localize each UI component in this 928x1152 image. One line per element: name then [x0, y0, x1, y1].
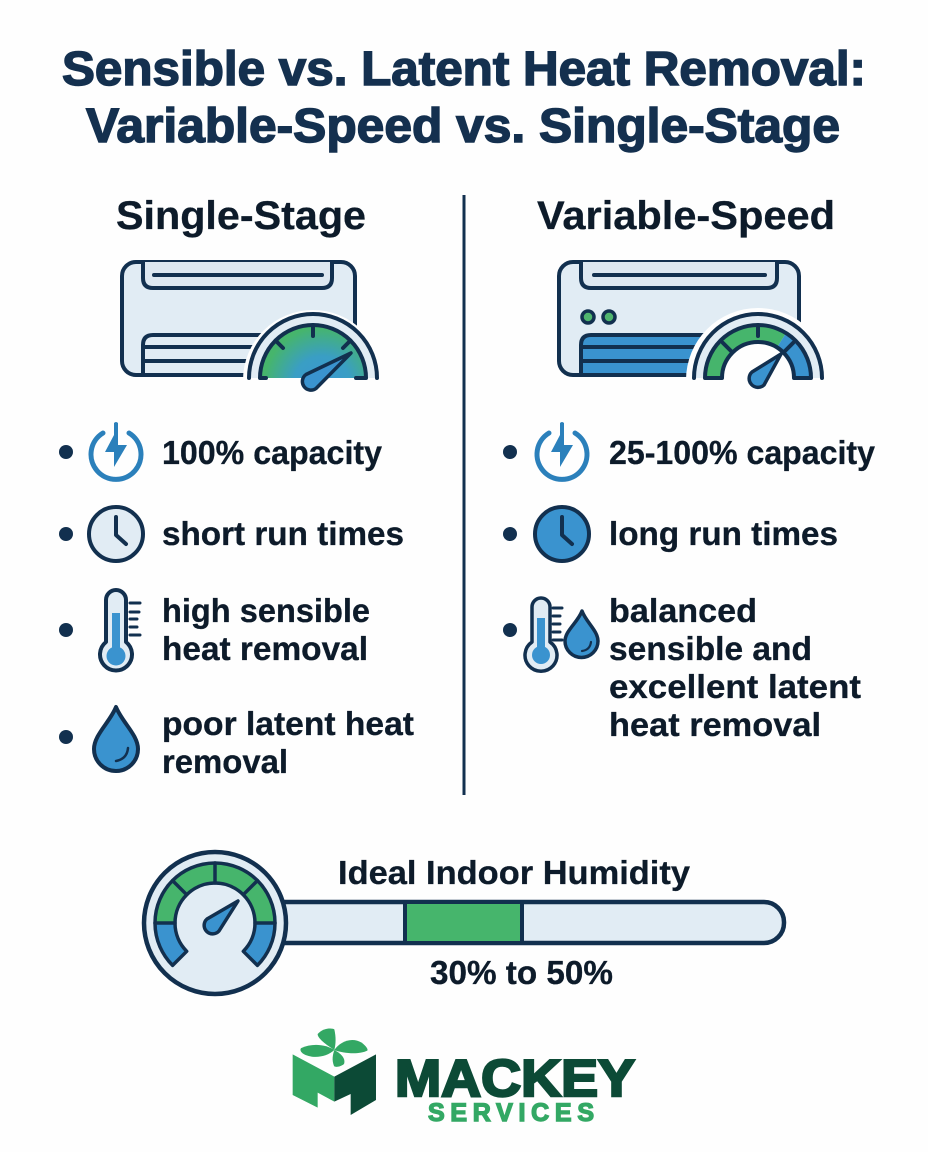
- logo: Mackey Services: SERVICES: [428, 1099, 594, 1127]
- bullet: high sensible heat removal: high sensible: [162, 592, 370, 629]
- title: Variable-Speed vs. Single-Stage: [86, 100, 840, 153]
- divider: [462, 195, 466, 795]
- bullet: short run times: [59, 507, 404, 561]
- bullet: 100% capacity: 100% capacity: [162, 434, 383, 471]
- bullet: long run times: [503, 507, 838, 561]
- icon: variable-speed AC unit with gauge: [559, 262, 830, 387]
- heading: single-stage: Single-Stage: [116, 194, 366, 238]
- icon: filled clock: [535, 507, 589, 561]
- logo: Mackey Services: [293, 1028, 635, 1127]
- humidity bar: [262, 902, 784, 943]
- bullet: 100% capacity: [59, 422, 383, 479]
- bullet: 25-100% capacity: 25-100% capacity: [609, 434, 876, 471]
- icon: humidity gauge: [144, 852, 286, 994]
- bullet: high sensible heat removal: heat removal: [162, 630, 368, 667]
- bullet: long run times: long run times: [609, 515, 838, 552]
- panel: ideal indoor humidity: [144, 852, 784, 994]
- icon: fan cube: [293, 1028, 376, 1115]
- bullet: poor latent heat removal: poor latent heat: [162, 705, 414, 742]
- title: Sensible vs. Latent Heat Removal:: [62, 43, 866, 96]
- bullet: poor latent heat removal: [59, 705, 414, 780]
- bullet: balanced sensible and excellent latent heat removal: [503, 592, 861, 743]
- panel: variable-speed: [503, 194, 876, 743]
- title: [62, 43, 866, 153]
- icon: single-stage AC unit with gauge: [122, 262, 383, 390]
- bullet: high sensible heat removal: [59, 590, 370, 670]
- bullet: poor latent heat removal: removal: [162, 743, 288, 780]
- bullet: 25-100% capacity: [503, 422, 876, 479]
- bullet: balanced sensible and excellent latent heat removal: heat removal: [609, 706, 821, 743]
- heading: variable-speed: Variable-Speed: [537, 194, 835, 238]
- bullet: balanced sensible and excellent latent heat removal: balanced: [609, 592, 757, 629]
- bullet: balanced sensible and excellent latent heat removal: sensible and: [609, 630, 812, 667]
- panel: single-stage: [59, 194, 414, 780]
- heading: ideal indoor humidity: Ideal Indoor Humidity: [338, 854, 691, 891]
- bullet: balanced sensible and excellent latent heat removal: excellent latent: [609, 668, 861, 705]
- icon: thermometer and water drop: [525, 598, 598, 671]
- icon: power bolt: [91, 422, 141, 479]
- range label: 30% to 50%: [430, 954, 613, 991]
- icon: thermometer: [100, 590, 140, 670]
- icon: water drop: [94, 707, 138, 771]
- icon: power bolt: [537, 422, 587, 479]
- logo: Mackey Services: MACKEY: [395, 1050, 635, 1108]
- icon: clock: [89, 507, 143, 561]
- bullet: short run times: short run times: [162, 515, 404, 552]
